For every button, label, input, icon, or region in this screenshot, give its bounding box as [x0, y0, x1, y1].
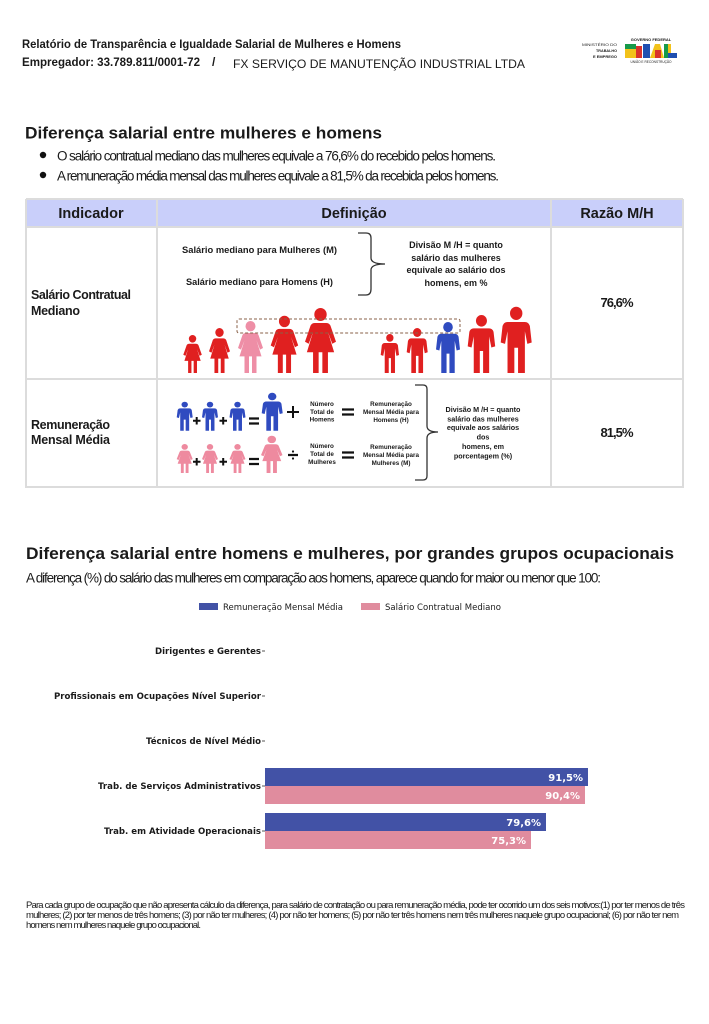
legend [199, 602, 501, 613]
subtitle: A diferença (%) do salário das mulheres em comparação aos homens, aparece quando for maior ou menor que 100: [26, 570, 601, 586]
definition note: division median: salário das mulheres [411, 253, 501, 263]
row label: remuneração mensal média [31, 418, 111, 447]
icons: men by salary [381, 307, 532, 373]
formula: women: Remuneração [370, 444, 412, 451]
bullet list: A remuneração média mensal das mulheres equivale a 81,5% da recebida pelos homens. [57, 168, 499, 184]
table header row: Razão M/H [580, 206, 654, 222]
definition note: division median: homens, em % [424, 278, 488, 288]
definition note: division average: salário das mulheres [447, 414, 519, 424]
formula: men: Remuneração [370, 401, 412, 408]
bars: serviços administrativos: 91,5% [548, 773, 583, 784]
formula: men: Total de [310, 409, 334, 416]
value: 76,6%: 76,6% [600, 295, 634, 310]
category labels: Trab. em Atividade Operacionais [104, 827, 261, 837]
bars: atividade operacionais: 79,6% [506, 818, 541, 829]
logo: government: E EMPREGO [593, 55, 617, 59]
bars: atividade operacionais: 75,3% [491, 836, 526, 847]
definition text: median salaries: Salário mediano para Mulheres (M) [182, 245, 337, 255]
definition note: division average: dos [477, 432, 489, 442]
footnote: mulheres; (2) por ter menos de três homens; (3) por não ter mulheres; (4) por não ter homens; (5) por não ter três homens nem três mulheres naquele grupo ocupacional; (6) por não ter nem [26, 910, 679, 921]
logo: government: GOVERNO FEDERAL [631, 37, 672, 42]
category labels [54, 647, 262, 837]
footnote: Para cada grupo de ocupação que não apresenta cálculo da diferença, para salário de contratação ou para remuneração média, pode ter ocorrido um dos seis motivos:(1) por ter menos de três [26, 900, 685, 911]
bullet list [40, 148, 499, 184]
definition note: division average [446, 405, 521, 460]
definition note: division average: porcentagem (%) [454, 452, 513, 460]
formula: men: Homens [310, 416, 335, 424]
formula: men: Homens (H) [373, 417, 409, 424]
category labels: Trab. de Serviços Administrativos [98, 782, 261, 792]
category labels: Dirigentes e Gerentes [155, 647, 261, 657]
definition note: division median: equivale ao salário dos [406, 265, 506, 275]
bars: serviços administrativos: 90,4% [545, 791, 580, 802]
definition note: division average: Divisão M /H = quanto [446, 405, 521, 414]
header: report title: / [212, 55, 216, 69]
category labels: Profissionais em Ocupações Nível Superior [54, 692, 262, 702]
logo: government: UNIÃO E RECONSTRUÇÃO [630, 59, 672, 64]
formula: women: Mulheres (M) [372, 460, 410, 467]
logo: government: MINISTÉRIO DO [582, 42, 617, 47]
definition note: division average: homens, em [462, 442, 504, 451]
table header row [25, 199, 683, 227]
row label: salário contratual mediano: Salário Contratual [31, 288, 131, 302]
header: report title [22, 37, 525, 71]
legend: Salário Contratual Mediano [385, 603, 501, 613]
formula: women: Número [310, 443, 334, 450]
icons: women by salary [183, 308, 336, 373]
header: report title: Empregador: 33.789.811/0001-72 [22, 55, 200, 69]
dashed median connector [237, 319, 460, 333]
row label: remuneração mensal média: Mensal Média [31, 433, 111, 447]
formula: women: Mulheres [308, 459, 336, 466]
header: report title: FX SERVIÇO DE MANUTENÇÃO INDUSTRIAL LTDA [233, 57, 525, 71]
logo: government [582, 37, 677, 64]
legend: Remuneração Mensal Média [223, 602, 343, 613]
formula: men [177, 393, 419, 431]
bars: atividade operacionais [265, 813, 546, 849]
bars: serviços administrativos [265, 768, 588, 804]
formula: men: Número [310, 401, 334, 408]
formula: women [177, 436, 419, 473]
heading: salary difference: Diferença salarial entre mulheres e homens [25, 124, 382, 142]
brace: median [358, 233, 385, 295]
heading: occupational groups: Diferença salarial entre homens e mulheres, por grandes grupos ocupacionais [26, 544, 674, 563]
row label: salário contratual mediano [31, 288, 131, 318]
table header row: Definição [321, 206, 387, 222]
footnote [26, 900, 685, 931]
value: 81,5%: 81,5% [600, 425, 634, 440]
definition note: division average: equivale aos salários [447, 423, 519, 432]
footnote: homens nem mulheres naquele grupo ocupacional. [26, 920, 201, 931]
formula: women: Mensal Média para [363, 452, 419, 459]
header: report title: Relatório de Transparência e Igualdade Salarial de Mulheres e Homens [22, 37, 401, 51]
definition text: median salaries [182, 245, 337, 287]
formula: women: Total de [310, 451, 334, 458]
logo: government: TRABALHO [596, 49, 617, 53]
row label: salário contratual mediano: Mediano [31, 304, 80, 318]
formula: men: Mensal Média para [363, 409, 419, 416]
bullet list: O salário contratual mediano das mulheres equivale a 76,6% do recebido pelos homens. [57, 148, 496, 164]
bar chart [54, 647, 588, 849]
table [25, 199, 683, 487]
definition note: division median: Divisão M /H = quanto [409, 240, 503, 250]
row label: remuneração mensal média: Remuneração [31, 418, 110, 432]
table header row: Indicador [58, 206, 124, 222]
category labels: Técnicos de Nível Médio [146, 736, 261, 747]
brace: average [415, 385, 438, 480]
definition note: division median [406, 240, 506, 288]
definition text: median salaries: Salário mediano para Homens (H) [186, 277, 333, 287]
